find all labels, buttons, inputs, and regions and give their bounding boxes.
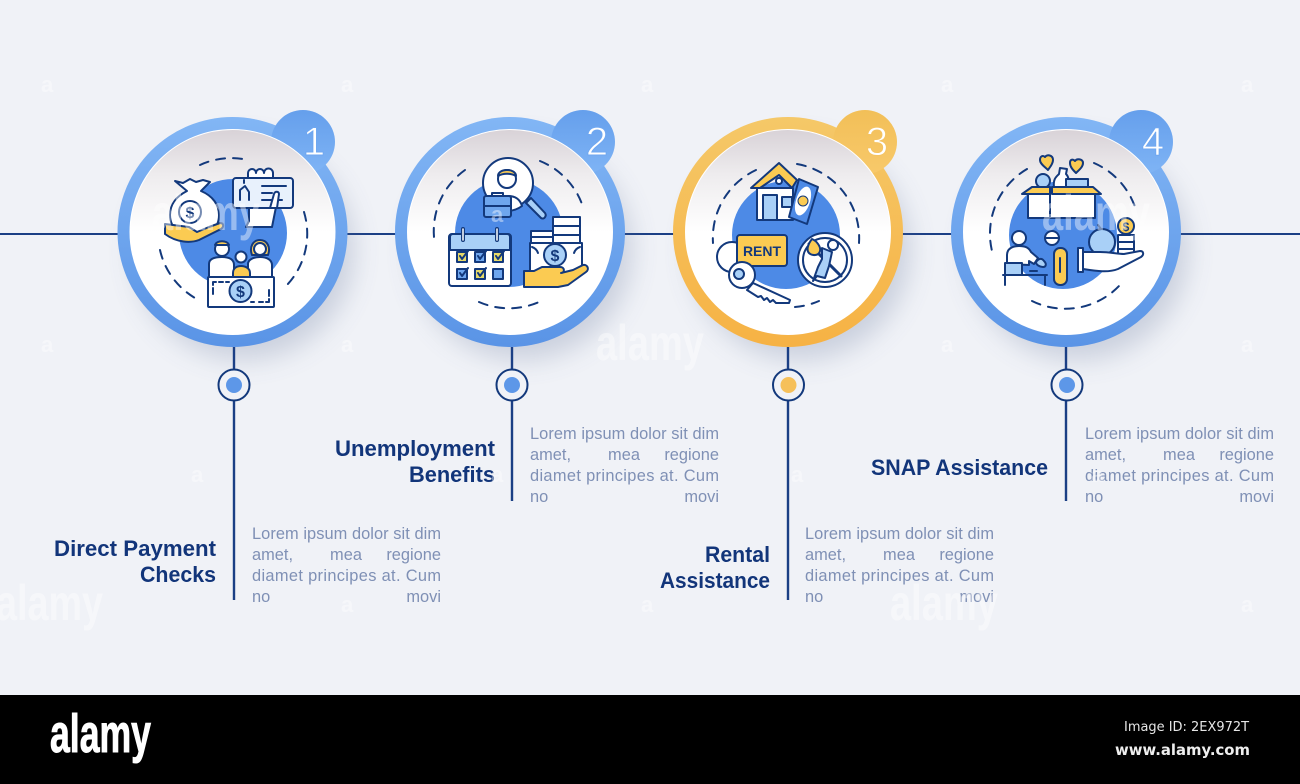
text block: description 3	[805, 525, 994, 606]
number badge 3	[833, 110, 897, 174]
watermarks: a	[341, 72, 354, 97]
inner disc 3	[686, 130, 890, 334]
text block: description 3: Lorem ipsum dolor sit dim	[805, 525, 994, 543]
text block: description 3: diamet principes at. Cum	[805, 567, 994, 585]
title: snap assistance: SNAP Assistance	[871, 455, 1048, 480]
ring shadow 3	[690, 140, 910, 360]
text block: description 4	[1085, 425, 1274, 506]
number badge 4	[1109, 110, 1173, 174]
ring shadow 2	[412, 140, 632, 360]
watermarks: alamy	[1042, 185, 1150, 241]
connector line 3	[787, 347, 789, 600]
watermarks: alamy	[152, 185, 260, 241]
title: unemployment benefits: Benefits	[409, 462, 495, 487]
watermarks: a	[341, 592, 354, 617]
text block: description 1: movi	[406, 588, 441, 606]
icon: magnifier with job seeker	[483, 158, 546, 219]
icon: cash and coins in hand: $	[551, 248, 560, 265]
watermarks: a	[341, 332, 354, 357]
number badge 2: 2	[586, 120, 608, 164]
footer logo: alamy	[50, 704, 151, 764]
text block: description 2: no	[530, 488, 548, 506]
text block: description 1: mea	[330, 546, 363, 564]
watermarks: a	[1241, 592, 1254, 617]
connector line 4	[1065, 347, 1067, 501]
timeline node 3	[773, 370, 804, 400]
dashed arcs 1	[160, 158, 307, 298]
text block: description 1	[252, 525, 441, 606]
text block: description 4: mea	[1163, 446, 1196, 464]
watermarks: a	[491, 462, 504, 487]
watermarks: a	[41, 72, 54, 97]
outer ring 2	[395, 117, 625, 347]
title: unemployment benefits	[335, 436, 496, 487]
text block: description 1: amet,	[252, 546, 293, 564]
blue centre 1	[179, 179, 287, 287]
text block: description 2: diamet principes at. Cum	[530, 467, 719, 485]
inner disc 4	[964, 130, 1168, 334]
watermarks: a	[1091, 462, 1104, 487]
icon: cash and coins in hand	[524, 217, 588, 287]
dashed arcs 3	[713, 164, 859, 307]
text block: description 2: Lorem ipsum dolor sit dim	[530, 425, 719, 443]
ring shadow 4	[968, 140, 1188, 360]
ring shadow 1	[134, 140, 354, 360]
watermarks: alamy	[0, 575, 103, 631]
text block: description 4: movi	[1239, 488, 1274, 506]
icon: hand holding ID card	[233, 169, 293, 227]
timeline node 2	[496, 370, 528, 400]
text block: description 3: amet,	[805, 546, 846, 564]
panel: step 2 unemployment benefits	[395, 110, 632, 501]
inner disc 1	[130, 130, 335, 334]
icon: hand with apple and coins	[1078, 218, 1143, 272]
blue centre 2	[455, 179, 563, 287]
dashed arcs 4	[990, 163, 1135, 309]
text block: description 4: amet,	[1085, 446, 1126, 464]
text block: description 4: Lorem ipsum dolor sit dim	[1085, 425, 1274, 443]
watermarks: a	[491, 202, 504, 227]
icon: money bag in hand	[165, 179, 223, 242]
text block: description 2: movi	[684, 488, 719, 506]
blue centre 4	[1009, 181, 1117, 289]
title: rental assistance: Rental	[705, 542, 770, 567]
number badge 4: 4	[1142, 120, 1164, 164]
icon: person cooking and worker	[1003, 231, 1067, 285]
text block: description 4: no	[1085, 488, 1103, 506]
text block: description 2: regione	[664, 446, 719, 464]
outer ring 1	[118, 117, 348, 347]
title: direct payment checks: Checks	[140, 562, 216, 587]
icon: hand with apple and coins: $	[1123, 220, 1130, 234]
panel: step 1 direct payment checks	[118, 110, 354, 600]
title: rental assistance: Assistance	[660, 568, 770, 593]
watermarks: a	[791, 462, 804, 487]
title: direct payment checks	[54, 536, 217, 587]
title: rental assistance	[660, 542, 770, 593]
icon: house with banknote	[751, 163, 818, 224]
text block: description 4: regione	[1219, 446, 1274, 464]
icon: money bag in hand: $	[186, 205, 195, 222]
title: direct payment checks: Direct Payment	[54, 536, 217, 561]
inner disc 2	[408, 130, 612, 334]
panel: step 4 snap assistance	[951, 110, 1188, 501]
connector line 1	[233, 347, 235, 600]
text block: description 2	[530, 425, 719, 506]
watermarks: alamy	[890, 575, 998, 631]
icon: family behind banknote	[208, 240, 274, 307]
text block: description 2: mea	[608, 446, 641, 464]
timeline node 1	[218, 370, 250, 400]
dashed arcs 2	[434, 161, 582, 308]
watermarks: a	[191, 462, 204, 487]
watermarks: a	[641, 72, 654, 97]
icon: rent sign with key	[717, 235, 790, 303]
watermarks: a	[1241, 332, 1254, 357]
website: www.alamy.com	[1115, 741, 1250, 759]
number badge 2	[551, 110, 615, 174]
text block: description 1: Lorem ipsum dolor sit dim	[252, 525, 441, 543]
watermarks: a	[1241, 72, 1254, 97]
text block: description 1: diamet principes at. Cum	[252, 567, 441, 585]
text block: description 3: mea	[883, 546, 916, 564]
icon: no-eviction sign	[798, 233, 852, 287]
icon: food donation box	[1022, 155, 1101, 218]
outer ring 4	[951, 117, 1181, 347]
text block: description 3: regione	[939, 546, 994, 564]
number badge 1	[271, 110, 335, 174]
icon: calendar checklist	[449, 229, 511, 286]
text block: description 4: diamet principes at. Cum	[1085, 467, 1274, 485]
watermarks	[0, 72, 1254, 631]
image id: Image ID: 2EX972T	[1124, 719, 1250, 735]
text block: description 3: movi	[959, 588, 994, 606]
horizontal timeline line	[0, 233, 1300, 235]
timeline node 4	[1052, 370, 1082, 400]
title: unemployment benefits: Unemployment	[335, 436, 496, 461]
outer ring 3	[673, 117, 903, 347]
blue centre 3	[732, 181, 840, 289]
icon: family behind banknote: $	[236, 284, 245, 301]
watermarks: a	[641, 592, 654, 617]
text block: description 2: amet,	[530, 446, 571, 464]
connector line 2	[511, 347, 513, 501]
text block: description 3: no	[805, 588, 823, 606]
text block: description 1: no	[252, 588, 270, 606]
number badge 3: 3	[866, 120, 888, 164]
watermarks: a	[41, 332, 54, 357]
panel: step 3 rental assistance	[673, 110, 910, 600]
footer bar	[0, 695, 1300, 784]
watermarks: a	[941, 332, 954, 357]
watermarks: a	[941, 72, 954, 97]
watermarks: alamy	[596, 315, 704, 371]
number badge 1: 1	[303, 120, 325, 164]
icon: rent sign with key: RENT	[743, 243, 781, 259]
text block: description 1: regione	[386, 546, 441, 564]
